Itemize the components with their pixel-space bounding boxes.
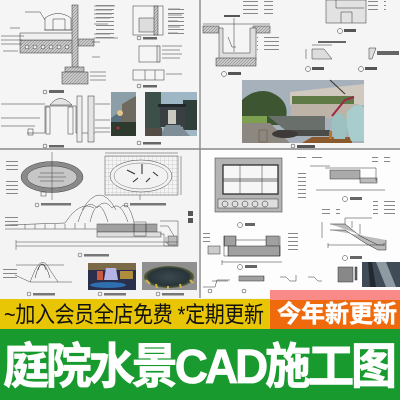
drawing: pond section [203, 1, 279, 76]
dividers [0, 148, 400, 150]
caption [156, 292, 184, 296]
drawing: cascade section [322, 200, 395, 260]
drawing: oval grid plan [105, 153, 181, 207]
drawing: pool long section [203, 230, 298, 270]
yellow promo band [0, 299, 270, 329]
title text: 庭院水景CAD施工图 [3, 339, 397, 393]
drawing: small plan details [133, 6, 184, 80]
title banner [0, 329, 400, 400]
drawing: oval fountain plan [6, 152, 83, 207]
red banner behind orange label [270, 290, 400, 302]
caption: render [291, 144, 315, 148]
notes [95, 3, 117, 39]
drawing: stepped section [310, 155, 390, 202]
drawing: small fountain detail [3, 262, 72, 296]
photo: glass canopy courtyard [111, 92, 136, 136]
photo: illuminated fountain at night [88, 263, 136, 290]
badge text: 今年新更新 [277, 300, 397, 328]
panel: wall section details (top left) [0, 0, 198, 148]
orange badge [270, 300, 400, 329]
caption [98, 292, 126, 296]
photo: courtyard with pavilion [145, 92, 197, 136]
promo text: ~加入会员全店免费 *定期更新 [4, 302, 264, 328]
drawing: small profiles [306, 41, 399, 72]
drawing: wall elevation [1, 96, 110, 142]
drawing: upper detail [326, 0, 386, 34]
panel: pond section with render (top right) [201, 0, 400, 148]
caption markers [43, 36, 161, 148]
drawing: fountain elevation [5, 195, 193, 257]
panel: oval fountain drawings (middle left) [0, 150, 198, 298]
photo: water feature render [242, 80, 364, 143]
photo: stone channel [362, 262, 400, 287]
drawing: wall section with ground layers [1, 3, 118, 84]
photo: oval pool with lights [142, 262, 197, 290]
drawing: rectangular pool plan [212, 154, 307, 228]
panel: pool plan drawings (middle right) [201, 150, 400, 298]
drawing: small detail row [203, 267, 357, 293]
